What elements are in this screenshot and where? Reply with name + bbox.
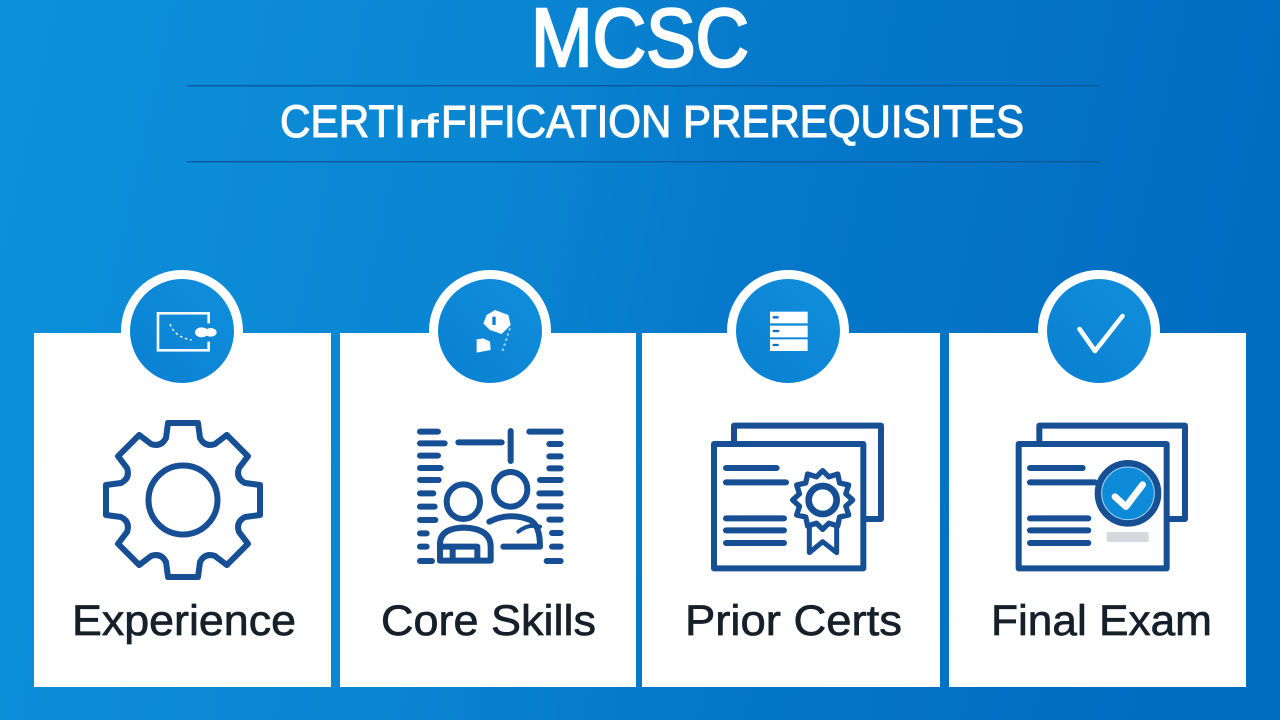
label: experience: Experience xyxy=(72,597,296,645)
panel: core skills xyxy=(340,270,636,687)
icon: certificate with rosette xyxy=(714,426,881,568)
panel: prior certs xyxy=(642,270,940,687)
badge: core skills xyxy=(429,270,551,392)
badge: prior certs xyxy=(727,270,849,392)
icon: server stack xyxy=(770,312,808,351)
label: prior certs: Prior Certs xyxy=(685,597,902,645)
panel: final exam xyxy=(949,270,1246,687)
subtitle: rf xyxy=(409,108,438,144)
badge: experience xyxy=(121,270,243,392)
icon: gear xyxy=(106,423,260,577)
icon: people with text lines xyxy=(420,431,561,561)
subtitle: CERTI xyxy=(280,96,406,147)
badge: final exam xyxy=(1038,270,1160,392)
icon: small gear fragment xyxy=(477,310,511,353)
icon: screen with hand xyxy=(158,313,217,350)
icon: certificate with check seal xyxy=(1019,426,1185,568)
label: final exam: Final Exam xyxy=(991,597,1212,645)
panel: experience xyxy=(34,270,331,687)
header xyxy=(187,0,1100,162)
subtitle: FIFICATION PREREQUISITES xyxy=(441,96,1024,147)
label: core skills: Core Skills xyxy=(381,597,596,645)
icon: check mark xyxy=(1080,316,1122,351)
